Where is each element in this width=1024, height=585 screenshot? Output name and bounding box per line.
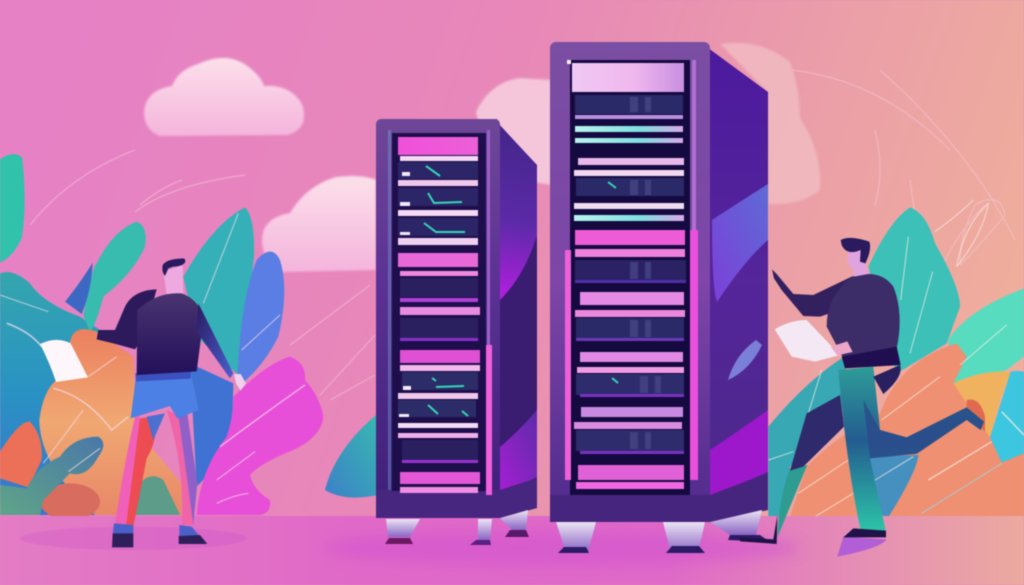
tall rack base (550, 473, 768, 522)
floor shadow (320, 530, 800, 566)
left person right arm (197, 303, 233, 378)
clouds (144, 43, 820, 272)
leaf: big teal (868, 207, 960, 373)
leaf: big teal mound (0, 272, 133, 515)
leaf: mint (948, 288, 1024, 383)
leaf: big orange (790, 343, 1024, 517)
leaf: tall teal (183, 207, 254, 377)
left person left leg (115, 417, 140, 527)
leaf: lower teal (768, 355, 847, 517)
left person back arm (97, 289, 157, 349)
server rack: right (550, 42, 770, 553)
foliage: left group (0, 154, 323, 520)
tall rack foot: back (710, 510, 762, 535)
tall rack slot dividers (630, 97, 661, 449)
right person front shoe (843, 528, 886, 537)
figure: right person (740, 238, 985, 557)
leaf veins (0, 213, 305, 503)
leaf: green lower (0, 437, 103, 515)
rack side magenta swoosh (500, 410, 537, 495)
leaf: magenta (197, 357, 323, 515)
tall rack glow rails (565, 250, 571, 480)
tall rack pale leaf (728, 340, 762, 380)
rack base (376, 478, 537, 518)
leaf: blue right (237, 252, 284, 385)
leaf: green right of legs (133, 476, 180, 515)
cloud: top left (144, 58, 304, 136)
rack foot: back (500, 510, 528, 530)
rack white LEDs (399, 172, 411, 417)
tall rack units (572, 63, 686, 489)
right person front leg (838, 367, 984, 531)
leaf: dark orange base (40, 483, 100, 520)
rack foot: front right (478, 519, 492, 540)
leaf: top-left green (0, 154, 25, 263)
left person shoes (113, 523, 133, 535)
rack opening (392, 133, 486, 491)
leaf: red-orange left (0, 422, 42, 487)
leaf: lower blue (190, 363, 233, 487)
leaf: orange mound (39, 329, 182, 515)
leaf: lower blue (867, 455, 918, 525)
cloud: behind left rack (262, 176, 376, 272)
tall rack opening (570, 60, 690, 495)
tall rack magenta swoosh (710, 410, 768, 497)
leaf veins (768, 200, 1024, 517)
rack side upper gradient (497, 122, 537, 300)
right person back thigh (790, 395, 844, 471)
left person right leg (167, 410, 193, 525)
left person blue thigh (147, 413, 165, 440)
rack side panel (490, 119, 537, 518)
rack teal indicators (424, 166, 468, 416)
rack glow rails (486, 345, 492, 495)
leaf: dark blue sliver (65, 263, 93, 314)
left person neck and face (163, 265, 183, 294)
cloud: behind right rack (476, 78, 552, 185)
tall rack foot: left (556, 522, 596, 552)
left person belt (135, 370, 191, 381)
right person waist (842, 347, 901, 368)
right person hand (831, 341, 853, 355)
leaf: yellow (953, 371, 1011, 437)
floor (0, 516, 1024, 585)
right person neck and face (847, 247, 868, 277)
leaf: cyan (990, 371, 1024, 463)
left person torso (137, 293, 203, 375)
right person floor shadow (837, 537, 887, 557)
right person back calf (777, 465, 807, 537)
rack foot: front left (386, 519, 420, 537)
server rack: left (376, 119, 537, 545)
cloud: right of tall rack (720, 43, 820, 204)
tall rack front frame (550, 42, 710, 522)
right person torso (827, 274, 900, 358)
left person hand (234, 374, 246, 391)
right person back shoe (740, 515, 777, 544)
right person hair (841, 238, 870, 263)
paper held by figure (40, 340, 88, 382)
rack front frame (376, 119, 500, 518)
tall rack blue band (712, 184, 768, 302)
right person hip shade (873, 365, 901, 394)
left person floor shadow (20, 527, 247, 550)
right person paper (775, 320, 840, 362)
figure: left person (20, 258, 247, 550)
leaf: teal between figure and left rack (325, 415, 378, 498)
right person thigh shade (863, 400, 984, 458)
leaf: upper teal (83, 222, 146, 332)
left person hair (162, 258, 185, 276)
foliage: right group (768, 200, 1024, 525)
right person raised foot (967, 400, 985, 432)
tall rack foot: middle (663, 522, 705, 553)
left person shorts (131, 373, 199, 419)
tall rack side panel (700, 42, 768, 522)
right person raised arm (772, 269, 852, 317)
rack units (398, 137, 480, 493)
decorative sketch lines (30, 70, 1015, 400)
